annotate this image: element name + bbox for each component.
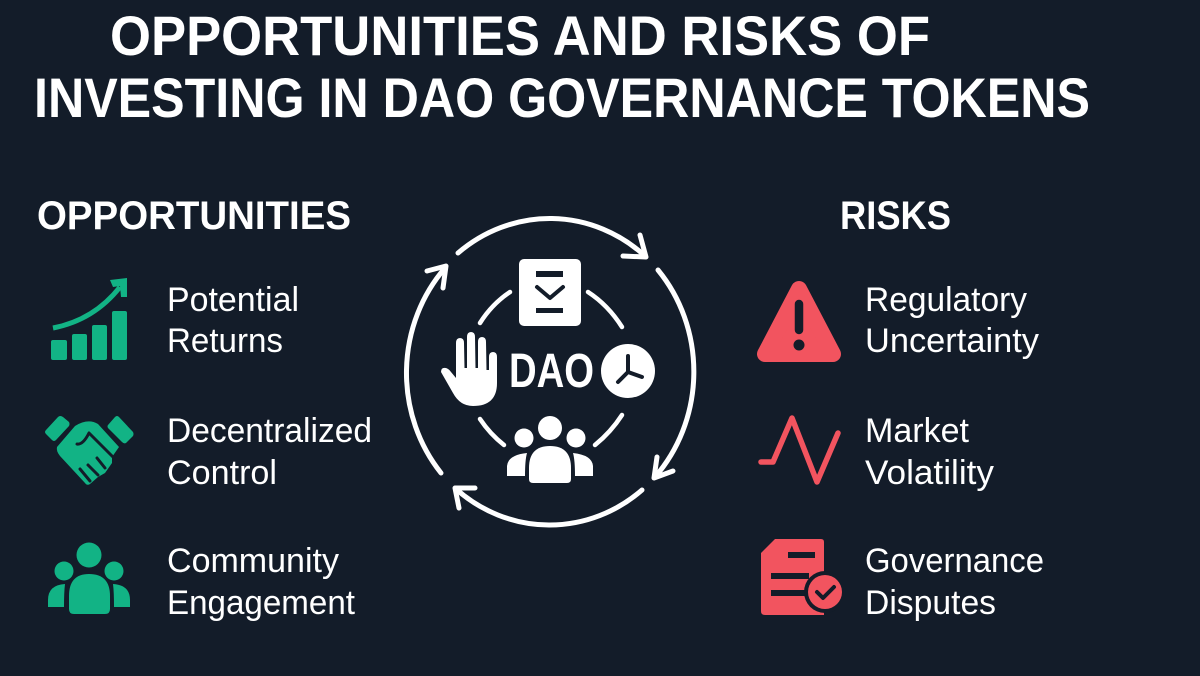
text: regulatory uncertainty: Regulatory <box>865 281 1027 319</box>
heading: risks: RISKS <box>840 194 951 238</box>
icon: clock <box>601 344 655 398</box>
text: market volatility <box>865 412 994 492</box>
icon: disputed document <box>761 539 846 615</box>
label: DAO: DAO <box>509 345 594 398</box>
heading: opportunities: OPPORTUNITIES <box>37 194 351 238</box>
text: potential returns <box>167 281 299 360</box>
title: OPPORTUNITIES AND RISKS OF <box>110 4 930 67</box>
icon: members <box>507 416 593 483</box>
icon: handshake <box>45 416 134 485</box>
icon: raised hand <box>441 332 497 406</box>
text: community engagement: Community <box>167 542 339 580</box>
title <box>34 4 1090 129</box>
text: governance disputes <box>865 542 1044 622</box>
title: INVESTING IN DAO GOVERNANCE TOKENS <box>34 66 1090 129</box>
panel: opportunities <box>37 194 372 622</box>
inner ring segments <box>480 292 622 445</box>
text: governance disputes: Governance <box>865 542 1044 580</box>
text: market volatility: Market <box>865 412 970 450</box>
icon: growth chart <box>51 278 127 360</box>
icon: warning triangle <box>765 289 833 354</box>
cycle arrows <box>406 219 694 525</box>
text: regulatory uncertainty: Uncertainty <box>865 322 1039 360</box>
text: community engagement <box>167 542 356 622</box>
text: decentralized control <box>167 412 372 492</box>
text: community engagement: Engagement <box>167 584 356 622</box>
icon: volatility line <box>761 418 838 482</box>
icon: ballot document <box>519 259 581 326</box>
text: potential returns: Returns <box>167 322 283 360</box>
text: decentralized control: Control <box>167 454 277 492</box>
diagram: DAO cycle <box>406 219 694 525</box>
panel: risks <box>761 194 1044 622</box>
text: regulatory uncertainty <box>865 281 1039 360</box>
text: governance disputes: Disputes <box>865 584 996 622</box>
icon: community <box>48 542 130 614</box>
text: market volatility: Volatility <box>865 454 994 492</box>
text: decentralized control: Decentralized <box>167 412 372 450</box>
text: potential returns: Potential <box>167 281 299 319</box>
